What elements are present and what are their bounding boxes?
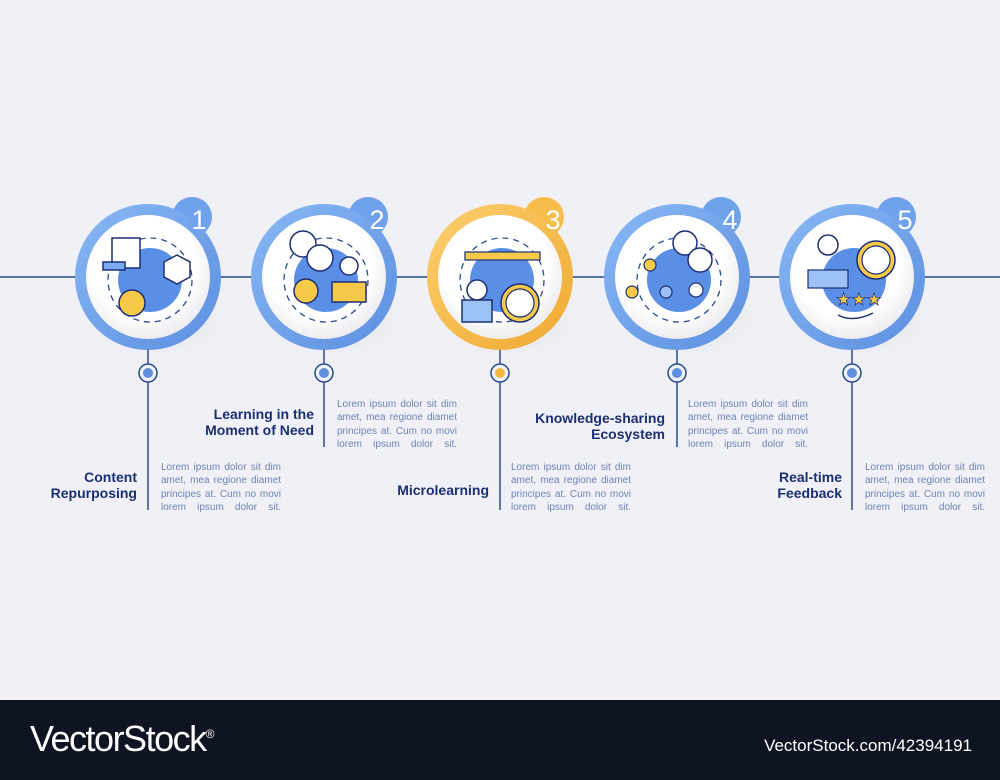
title 1 [51,469,137,501]
step 1 [75,197,240,510]
title 4: Knowledge-sharing [535,410,665,426]
footer bar [0,700,1000,780]
title 1: Repurposing [51,485,137,501]
step 5: ★★★ [836,290,882,309]
step 1: 1 [191,205,207,235]
title 3: Microlearning [397,482,489,498]
title 2: Moment of Need [205,422,314,438]
logo: VectorStock® [30,718,213,759]
text 2: Lorem ipsum dolor sit dim amet, mea regione diamet principes at. Cum no movi lorem ipsum dolor sit. [337,399,457,450]
step 5: 5 [897,205,913,235]
text 3: Lorem ipsum dolor sit dim amet, mea regione diamet principes at. Cum no movi lorem ipsum dolor sit. [511,462,631,513]
title 1: Content [84,469,137,485]
title 5: Real-time [779,469,842,485]
title 2: Learning in the [214,406,314,422]
text 1: Lorem ipsum dolor sit dim amet, mea regione diamet principes at. Cum no movi lorem ipsum dolor sit. [161,462,281,513]
step 4: 4 [722,205,738,235]
title 5: Feedback [777,485,842,501]
title 2 [205,406,314,438]
url: VectorStock.com/42394191 [764,736,972,755]
step 3: 3 [545,205,561,235]
title 5 [777,469,842,501]
title 4: Ecosystem [591,426,665,442]
step 5 [779,197,944,510]
title 4 [535,410,665,442]
step 2 [251,197,416,447]
text 5: Lorem ipsum dolor sit dim amet, mea regione diamet principes at. Cum no movi lorem ipsum dolor sit. [865,462,985,513]
step 3 [427,197,592,510]
step 4 [604,197,769,447]
step 2: 2 [369,205,385,235]
text 4: Lorem ipsum dolor sit dim amet, mea regione diamet principes at. Cum no movi lorem ipsum dolor sit. [688,399,808,450]
